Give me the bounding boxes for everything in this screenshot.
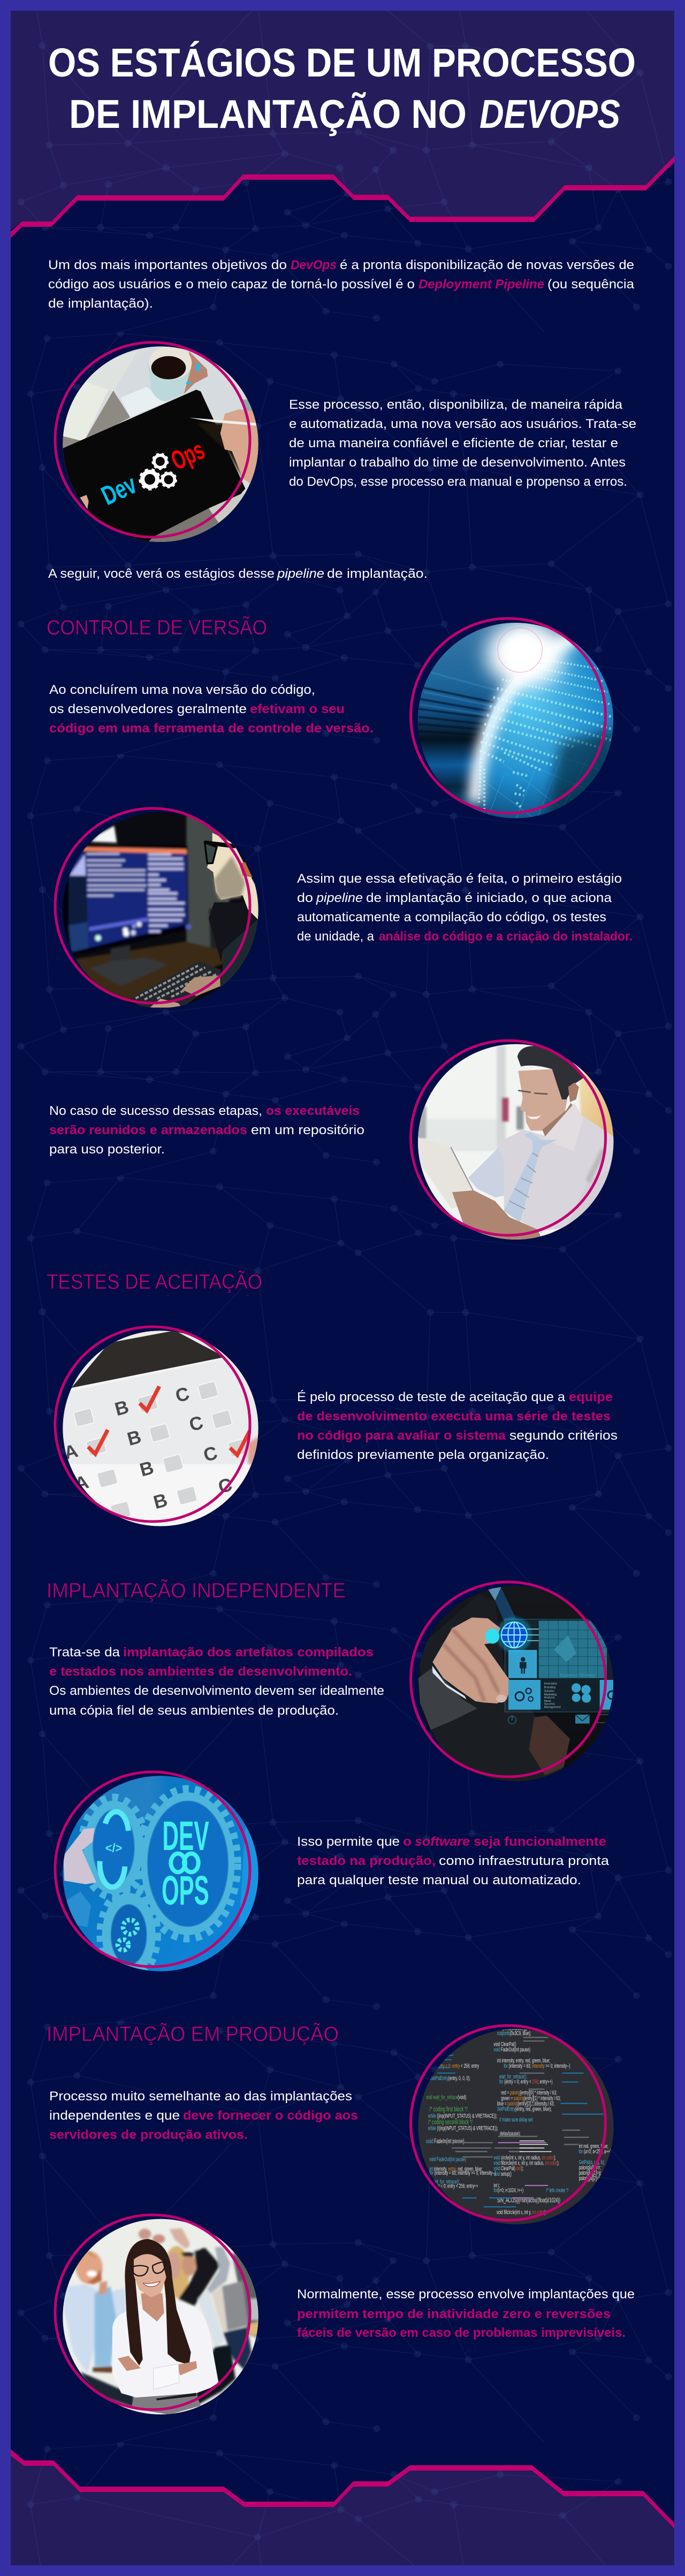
paragraph: pipeline first stage: automaticamente a compilação do código, os testes: [297, 910, 606, 924]
photo: source code screen: entry = 0; entry < 256; entry++: [432, 2183, 478, 2189]
photo: source code screen: int red, green, blue;: [579, 2143, 608, 2149]
intro text block: [48, 258, 634, 311]
paragraph: production testing: software: [415, 1834, 470, 1849]
photo: DevOps gears: </>: [105, 1841, 122, 1855]
photo: smiling woman with team: [54, 2214, 258, 2414]
paragraph: acceptance tests: no código para avaliar o sistema: [297, 1428, 506, 1443]
photo: source code screen: red = palorig[entry][0] * intensity / 63;: [501, 2089, 557, 2096]
paragraph: process description: de uma maneira confiável e eficiente de criar, testar e: [289, 436, 618, 450]
photo: hand touching virtual interface: Marketing: [544, 1693, 557, 1696]
photo: source code screen: SetPalEntry(entry, 0, 0, 0);: [430, 2075, 470, 2081]
photo: source code screen: void FadeOut(int pause): [429, 2156, 466, 2162]
photo: hand touching virtual interface: Ideas: [544, 1700, 551, 1703]
paragraph: production testing: para qualquer teste manual ou automatizado.: [297, 1873, 581, 1887]
photo: checklist test sheet: B: [125, 1426, 143, 1450]
paragraph: pipeline first stage: de unidade, a: [297, 929, 374, 944]
top magenta stepped band: [11, 156, 674, 238]
paragraph: independent deployment: implantação dos artefatos compilados: [123, 1645, 374, 1660]
top purple header area: [0, 0, 685, 238]
paragraph: production deployment: servidores de produção ativos.: [49, 2128, 248, 2142]
paragraph: acceptance tests: definidos previamente pela organização.: [297, 1448, 549, 1462]
paragraph: pipeline first stage: Assim que essa efetivação é feita, o primeiro estágio: [297, 872, 622, 886]
paragraph: pipeline first stage: pipeline: [316, 891, 363, 905]
paragraph: production testing: [297, 1834, 609, 1887]
intro text block: é a pronta disponibilização de novas versões de: [340, 258, 634, 272]
photo: source code screen: void FadeOut(int pause): [493, 2046, 530, 2053]
photo: checklist test sheet: C: [216, 1474, 234, 1497]
photo: source code screen: int intensity, entry, red, green, blue;: [497, 2057, 550, 2063]
paragraph: zero downtime: Normalmente, esse processo envolve implantações que: [297, 2287, 635, 2302]
intro text block: (ou sequência: [547, 277, 634, 292]
paragraph: acceptance tests: [297, 1390, 618, 1462]
paragraph: build artifacts: No caso de sucesso dessas etapas,: [49, 1104, 262, 1118]
photo: hand touching virtual interface: Management: [544, 1706, 561, 1709]
photo: checklist test sheet: B: [112, 1396, 131, 1420]
paragraph: production testing: testado na produção,: [297, 1854, 436, 1868]
photo: checklist test sheet: A: [62, 1440, 80, 1464]
photo: source code screen: outportb(0x3C9, blue);: [497, 2030, 531, 2036]
photo: source code screen: // make sure delay set: [499, 2116, 533, 2123]
heading: testes de aceitação: TESTES DE ACEITAÇÃO: [47, 1271, 262, 1294]
paragraph: process description: e automatizada, uma nova versão aos usuários. Trata-se: [289, 417, 636, 431]
photo: source code screen: void fillcircle(int x, int y, int radius, int color);: [493, 2160, 559, 2166]
paragraph: code commit: Ao concluírem uma nova versão do código,: [49, 683, 315, 697]
photo: source code screen: int intensity, entry, red, green, blue;: [429, 2166, 483, 2172]
photo: source code screen: /* coding first block */: [429, 2106, 467, 2113]
paragraph: production testing: Isso permite que: [297, 1834, 400, 1849]
photo: checklist test sheet: C: [201, 1442, 219, 1466]
paragraph: code commit: efetivam o seu: [250, 702, 345, 716]
heading: controle de versão: CONTROLE DE VERSÃO: [47, 616, 267, 639]
paragraph: independent deployment: [49, 1645, 384, 1718]
photo: source code screen: void setup(): [493, 2170, 512, 2177]
paragraph: zero downtime: [297, 2287, 635, 2340]
paragraph: production deployment: independentes e que: [49, 2108, 180, 2123]
photo: DevOps gears: DEV: [162, 1813, 209, 1859]
photo: checklist test sheet: B: [138, 1457, 156, 1481]
photo: hand touching virtual interface: Success: [544, 1703, 555, 1706]
paragraph: build artifacts: [49, 1104, 364, 1157]
photo: source code screen: for (intensity = 63; intensity >= 0; intensity--): [504, 2062, 570, 2069]
paragraph: zero downtime: fáceis de versão em caso de problemas imprevisíveis.: [297, 2326, 626, 2340]
paragraph: zero downtime: permitem tempo de inatividade zero e reversões: [297, 2307, 611, 2321]
paragraph: code commit: os desenvolvedores geralmente: [49, 702, 247, 716]
photo: DevOps gears: [54, 1771, 258, 1971]
photo: source code screen: palorig[a][2]=b;: [579, 2175, 602, 2181]
photo: hand touching virtual interface: [409, 1580, 613, 1782]
photo: source code screen: palorig[a][0]=r;: [579, 2164, 601, 2170]
paragraph: process description: implantar o trabalho do time de desenvolvimento. Antes: [289, 455, 626, 470]
heading: implantação independente: IMPLANTAÇÃO INDEPENDENTE: [47, 1579, 346, 1602]
photo: source code screen: void circle(int x, int y, int radius, int color);: [493, 2154, 556, 2161]
photo: source code screen: for (a=0; a<256; a++): [579, 2148, 611, 2154]
title: DE IMPLANTAÇÃO NO: [69, 91, 467, 136]
photo: source code screen: GetPal(a, r, g, b);: [579, 2159, 605, 2165]
paragraph: independent deployment: Os ambientes de desenvolvimento devem ser idealmente: [49, 1684, 384, 1698]
photo: hand touching virtual interface: Business Strategy: [560, 1672, 596, 1678]
photo: checklist test sheet: A: [72, 1471, 91, 1495]
photo: hand touching virtual interface: Solution: [544, 1690, 554, 1693]
paragraph: production deployment: Processo muito semelhante ao das implantações: [49, 2089, 352, 2104]
photo: hand touching virtual interface: Innovation: [544, 1683, 557, 1686]
photo: checklist test sheet: [54, 1326, 258, 1526]
paragraph: pipeline first stage: [297, 872, 633, 944]
intro text block: Um dos mais importantes objetivos do: [48, 258, 287, 272]
photo: source code screen: void ClearPal(): [493, 2041, 516, 2047]
photo: source code screen: /* lets create */: [546, 2187, 569, 2193]
photo: source code screen: for (entry = 0; entry < 256; entry++): [499, 2078, 552, 2085]
paragraph: production deployment: deve fornecer o código aos: [183, 2108, 358, 2123]
photo: source code screen: void ClearPal(void);: [493, 2165, 523, 2172]
ring: [55, 1772, 250, 1967]
intro text block: de implantação).: [48, 296, 153, 311]
photo: source code screen: wait_for_retrace();: [432, 2178, 460, 2185]
title: DEVOPS: [480, 91, 620, 136]
photo: DevOps gears: OPS: [162, 1868, 209, 1914]
photo: source code screen: wait_for_retrace();: [499, 2073, 527, 2080]
photo: tablet with DevOps logo: Ops: [166, 434, 209, 476]
paragraph: independent deployment: Trata-se da: [49, 1645, 120, 1660]
photo: source code screen: [409, 2024, 614, 2225]
paragraph: build artifacts: para uso posterior.: [49, 1142, 165, 1157]
title: OS ESTÁGIOS DE UM PROCESSO: [48, 40, 636, 85]
photo: source code screen: for(i=0; i<1024; i++): [493, 2187, 523, 2193]
ring: [55, 1327, 250, 1522]
bottom magenta stepped band: [11, 2449, 674, 2528]
paragraph: acceptance tests: É pelo processo de teste de aceitação que a: [297, 1390, 565, 1404]
photo: source code screen: void FadeIn(int pause): [426, 2138, 465, 2145]
paragraph: pipeline first stage: de implantação é iniciado, o que aciona: [366, 891, 612, 905]
photo: man with tablet: [409, 1039, 613, 1240]
paragraph: production testing: seja funcionalmente: [474, 1834, 606, 1849]
photo: source code screen: while (!(inp(INPUT_STATUS) & VRETRACE));: [428, 2125, 498, 2131]
photo: source code screen: SetPalEntry(entry, red, green, blue);: [497, 2106, 552, 2112]
paragraph: production deployment: [49, 2089, 358, 2142]
photo: source code screen: palorig[a][1]=g;: [579, 2169, 602, 2176]
intro text block: código aos usuários e o meio capaz de torná-lo possível é o: [48, 277, 415, 292]
paragraph: production testing: o: [403, 1834, 412, 1849]
ring: [55, 342, 250, 537]
photo: hand touching virtual interface: Analysis: [544, 1696, 555, 1699]
photo: source code screen: int i;: [493, 2182, 500, 2189]
photo: source code screen: void wait_for_retrace(void): [426, 2094, 466, 2100]
photo: source code screen: entry = 0; entry < 256; entry: [437, 2062, 479, 2069]
paragraph: code commit: [49, 683, 374, 736]
paragraph: build artifacts: os executáveis: [266, 1104, 360, 1118]
paragraph: code commit: código em uma ferramenta de controle de versão.: [49, 721, 374, 736]
ring: [411, 1582, 606, 1777]
title: [48, 40, 636, 136]
paragraph: pipeline first stage: do: [297, 891, 313, 905]
paragraph: independent deployment: e testados nos ambientes de desenvolvimento.: [49, 1664, 352, 1679]
ring: [411, 2025, 606, 2220]
photo: source code screen: SIN_ACOS[i]=sin(acos((float)i/1024)): [497, 2197, 560, 2204]
photo: binary globe: [409, 617, 613, 819]
photo: checklist test sheet: C: [173, 1383, 192, 1407]
lead-in sentence: [48, 567, 428, 581]
paragraph: process description: [289, 398, 636, 489]
photo: source code screen: delay(pause);: [500, 2130, 521, 2137]
photo: tablet with DevOps logo: Dev: [97, 469, 141, 511]
paragraph: acceptance tests: equipe: [569, 1390, 613, 1404]
ring: [55, 2215, 250, 2410]
paragraph: acceptance tests: de desenvolvimento executa uma série de testes: [297, 1409, 611, 1424]
ring: [411, 1041, 606, 1235]
paragraph: build artifacts: em um repositório: [251, 1123, 364, 1137]
photo: source code screen: /* coding second block */: [428, 2119, 473, 2126]
intro text block: Deployment Pipeline: [418, 277, 544, 292]
photo: source code screen: blue = palorig[entry][2] * intensity / 63;: [497, 2100, 554, 2107]
paragraph: production testing: como infraestrutura pronta: [439, 1854, 609, 1868]
bottom purple footer area: [0, 2449, 685, 2576]
lead-in sentence: pipeline: [277, 567, 324, 581]
paragraph: build artifacts: serão reunidos e armazenados: [49, 1123, 247, 1137]
paragraph: process description: do DevOps, esse processo era manual e propenso a erros.: [289, 475, 627, 489]
photo: source code screen: while ((inp(INPUT_STATUS) & VRETRACE));: [428, 2113, 497, 2119]
photo: checklist test sheet: B: [151, 1489, 170, 1513]
photo: source code screen: green = palorig[entry][1] * intensity / 63;: [501, 2095, 561, 2101]
lead-in sentence: de implantação.: [327, 567, 428, 581]
lead-in sentence: A seguir, você verá os estágios desse: [48, 567, 275, 581]
photo: source code screen: outportb(0x3C9, g);: [498, 2025, 528, 2031]
photo: checklist test sheet: C: [187, 1412, 206, 1435]
intro text block: DevOps: [291, 258, 337, 272]
ring: [411, 618, 606, 813]
photo: developer at monitor: [54, 807, 258, 1008]
photo: hand touching virtual interface: Branding: [544, 1686, 555, 1689]
paragraph: process description: Esse processo, então, disponibiliza, de maneira rápida: [289, 398, 622, 412]
photo: source code screen: for (intensity = 63; intensity >= 0; intensity--): [429, 2169, 496, 2176]
paragraph: acceptance tests: segundo critérios: [509, 1428, 618, 1443]
paragraph: independent deployment: uma cópia fiel de seus ambientes de produção.: [49, 1703, 339, 1718]
photo: source code screen: void fillcircle(int x, int y, int color);: [497, 2209, 546, 2215]
paragraph: pipeline first stage: análise do código e a criação do instalador.: [379, 929, 633, 944]
photo: tablet with DevOps logo: [54, 341, 258, 542]
heading: implantação em produção: IMPLANTAÇÃO EM PRODUÇÃO: [47, 2023, 339, 2046]
ring: [55, 808, 250, 1003]
